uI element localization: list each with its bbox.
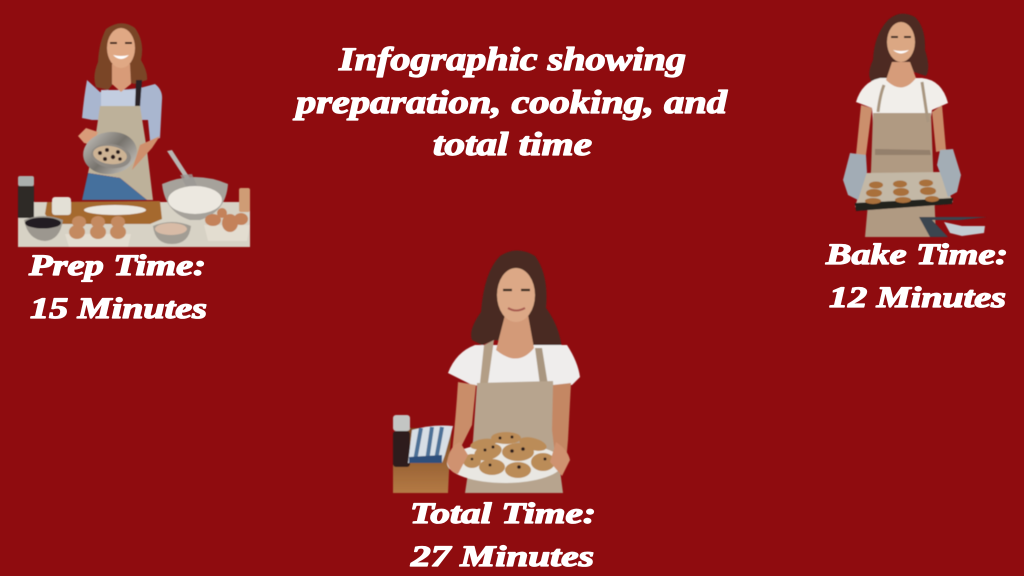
label: total time: Total Time: xyxy=(410,497,596,530)
label: total time: 27 Minutes xyxy=(410,540,594,573)
title: total time xyxy=(433,127,592,163)
illustration: woman holding plate of cookies xyxy=(393,250,580,493)
label: prep time: 15 Minutes xyxy=(30,292,207,325)
title: Infographic showing xyxy=(338,42,686,78)
label: bake time: Bake Time: xyxy=(825,238,1008,271)
label: bake time: 12 Minutes xyxy=(829,281,1006,314)
panel: prep time xyxy=(18,23,250,325)
panel: total time xyxy=(393,250,596,573)
illustration: woman preparing dough at counter xyxy=(18,23,250,247)
label: prep time xyxy=(28,249,207,325)
label: total time xyxy=(410,497,596,573)
panel: bake time xyxy=(825,14,1008,314)
label: prep time: Prep Time: xyxy=(28,249,206,282)
illustration: woman holding baking tray xyxy=(843,14,987,237)
title: preparation, cooking, and xyxy=(292,85,728,121)
label: bake time xyxy=(825,238,1008,314)
title xyxy=(292,42,728,163)
